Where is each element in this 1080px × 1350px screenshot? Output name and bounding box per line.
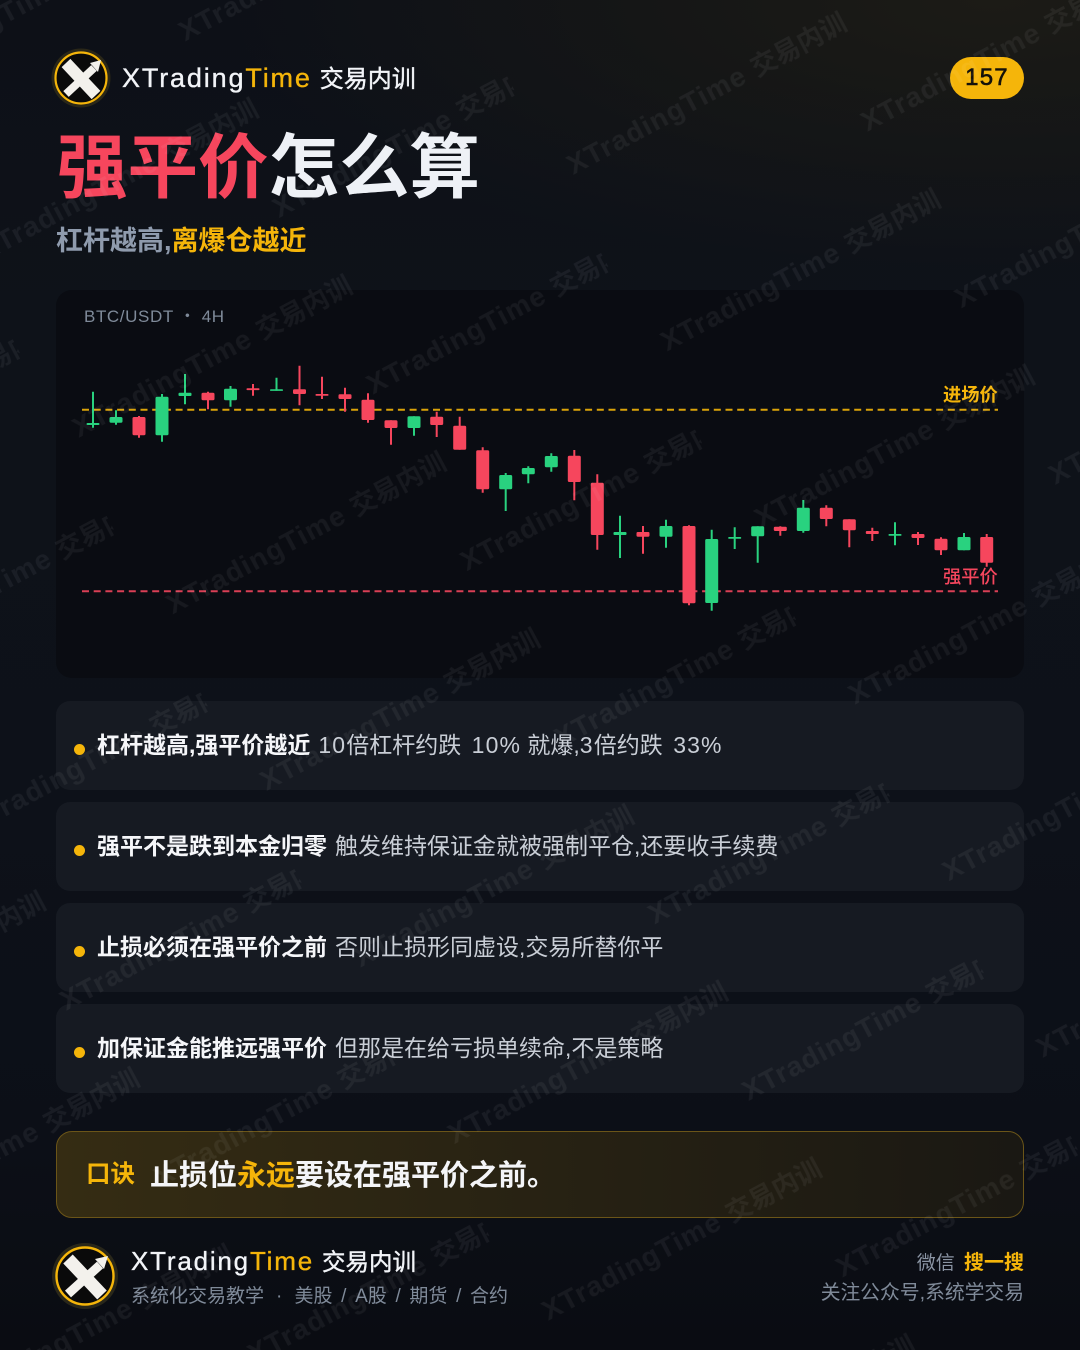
panel: candlestick chart (56, 290, 1024, 678)
footer call to action: 微信 搜一搜 (917, 1252, 1024, 1274)
logo: footer (52, 1243, 118, 1309)
liquidation price line (82, 590, 998, 592)
logo: header (52, 48, 110, 108)
panel: point 3: 止损必须在强平价之前 否则止损形同虚设,交易所替你平 (97, 934, 663, 960)
callout: mantra (56, 1131, 1024, 1218)
brand name: footer: XTradingTime 交易内训 (131, 1246, 416, 1276)
entry price line (82, 409, 998, 411)
subtitle: 杠杆越高,离爆仓越近 (56, 226, 307, 256)
panel: point 2: 强平不是跌到本金归零 触发维持保证金就被强制平仓,还要收手续费 (97, 833, 778, 859)
red candles (132, 366, 993, 605)
chart label: pair and timeframe: BTC/USDT ・ 4H (84, 307, 225, 326)
callout: mantra: 口诀 (86, 1161, 135, 1188)
panel: point 2 (56, 802, 1024, 891)
footer note: 关注公众号,系统学交易 (821, 1282, 1024, 1304)
green candles (86, 374, 970, 611)
title: 强平价怎么算 (57, 128, 480, 207)
footer tagline: 系统化交易教学 · 美股 / A股 / 期货 / 合约 (131, 1286, 508, 1307)
panel: point 3 (56, 903, 1024, 992)
label: entry price: 进场价 (943, 384, 998, 405)
panel: point 4 (56, 1004, 1024, 1093)
badge: issue number: 157 (965, 64, 1009, 91)
panel: point 4: 加保证金能推远强平价 但那是在给亏损单续命,不是策略 (97, 1035, 663, 1061)
panel: point 1: 杠杆越高,强平价越近 10倍杠杆约跌 10% 就爆,3倍约跌 33% (97, 732, 723, 758)
panel: point 1 (56, 701, 1024, 790)
brand name: header: XTradingTime 交易内训 (122, 63, 416, 93)
label: liquidation price: 强平价 (943, 566, 998, 587)
callout: mantra: 止损位永远要设在强平价之前。 (150, 1160, 556, 1192)
badge: issue number (950, 57, 1024, 99)
